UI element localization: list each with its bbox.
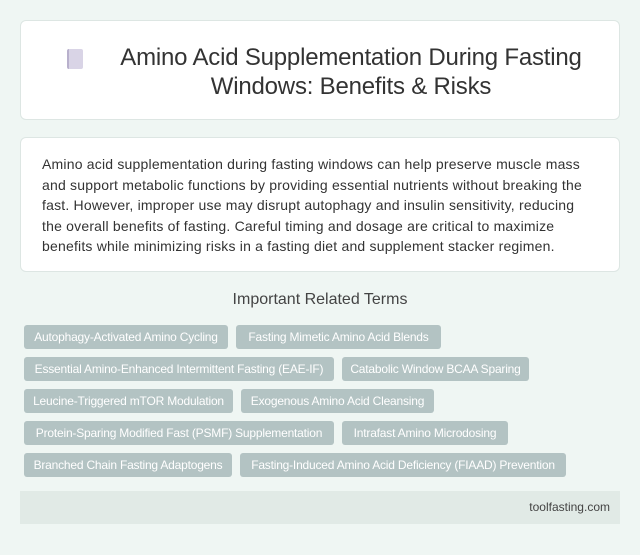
tags: Intrafast Amino Microdosing [354,426,496,440]
icon: document [67,49,83,69]
tags: Exogenous Amino Acid Cleansing [251,394,424,408]
section heading: Important Related Terms [233,291,407,308]
description text: Amino acid supplementation during fasting windows can help preserve muscle mass and support metabolic functions by providing essential nutrients without breaking the fast. However, improper use may disrupt autophagy and insulin sensitivity, reducing the overall benefits of fasting. Careful timing and dosage are critical to maximize benefits while minimizing risks in a fasting diet and supplement stacker regimen. [42,156,582,254]
tags: Autophagy-Activated Amino Cycling [34,330,218,344]
footer [20,491,620,524]
tags: Leucine-Triggered mTOR Modulation [33,394,224,408]
footer text: toolfasting.com [529,500,610,514]
tags: Fasting-Induced Amino Acid Deficiency (FIAAD) Prevention [251,458,555,472]
title: Amino Acid Supplementation During Fasting Windows: Benefits & Risks [120,44,582,100]
description card [20,137,620,272]
tags: Branched Chain Fasting Adaptogens [34,458,222,472]
tags: Essential Amino-Enhanced Intermittent Fasting (EAE-IF) [35,362,323,376]
header card [20,20,620,120]
tags: Fasting Mimetic Amino Acid Blends [248,330,429,344]
tags: Catabolic Window BCAA Sparing [350,362,521,376]
tags: Protein-Sparing Modified Fast (PSMF) Supplementation [36,426,322,440]
